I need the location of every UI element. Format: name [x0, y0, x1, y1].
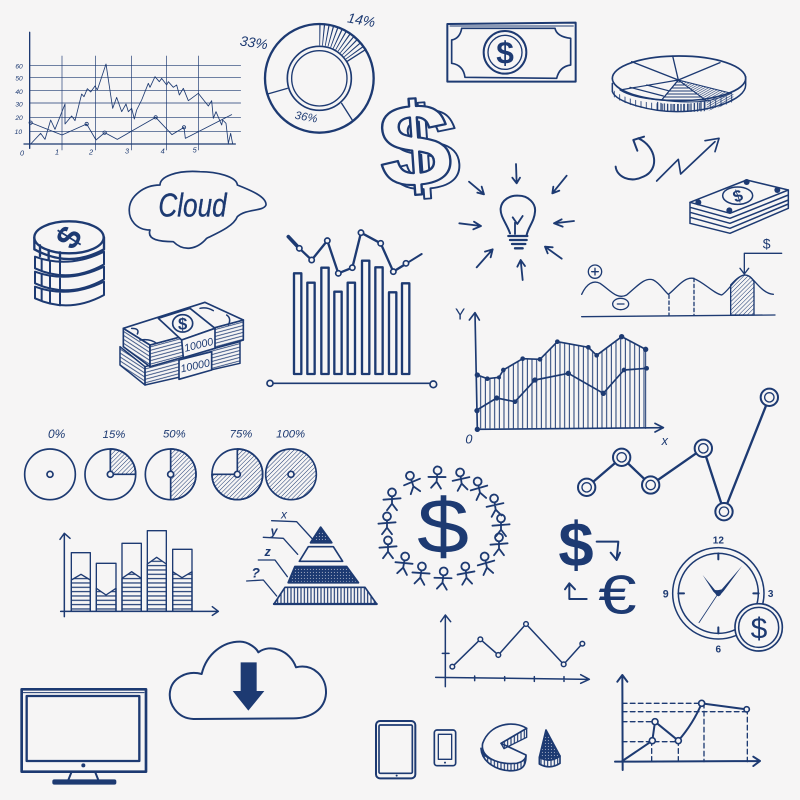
- icon: coin stack: [34, 220, 104, 305]
- line chart: top left: 2: [88, 147, 93, 156]
- icon: banknote: [447, 23, 576, 82]
- icon: stack of banknotes 10000: 10000: [183, 336, 215, 355]
- dashed line chart bottom right: [615, 675, 760, 770]
- figures ring: [378, 466, 510, 590]
- icon: 3D pie with missing wedge: [481, 724, 527, 771]
- line chart: top left: 1: [55, 147, 59, 156]
- currency exchange dollar and euro: €: [598, 565, 636, 626]
- pyramid chart with labels: [247, 508, 377, 604]
- icon: smartphone: [434, 730, 456, 766]
- clock with coin: 12: [713, 535, 724, 546]
- line chart: top left: 50: [15, 76, 23, 83]
- icon: stack of banknotes 10000: 10000: [180, 357, 211, 375]
- wave chart with shaded region: [582, 235, 782, 317]
- pie: 50%: [145, 428, 196, 500]
- line chart: top left: 60: [15, 63, 23, 70]
- thought cloud with text: Cloud: [158, 188, 228, 225]
- icon: flat bill stack: [690, 179, 788, 233]
- pie: 50%: 50%: [163, 428, 186, 440]
- pie: 0%: 0%: [48, 427, 66, 441]
- clock with coin: 9: [663, 588, 669, 600]
- icon: cone: [539, 730, 560, 767]
- line chart: top left: 4: [161, 146, 165, 155]
- small line chart: [436, 615, 589, 687]
- lower stack: [120, 342, 240, 385]
- line chart: top left: 20: [14, 115, 23, 122]
- progress pies row: [25, 427, 316, 500]
- arrow: curved: [616, 137, 654, 179]
- line chart: top left: 5: [193, 146, 198, 155]
- icon: stack of banknotes 10000: [120, 302, 243, 385]
- pie: 15%: 15%: [103, 429, 125, 441]
- line chart: top left: 3: [125, 146, 130, 155]
- large dollar sign: $: [417, 483, 469, 570]
- wave chart with shaded region: $: [763, 235, 771, 251]
- donut chart: [239, 9, 377, 133]
- pyramid chart with labels: x: [280, 508, 288, 522]
- pie: 0%: [25, 427, 75, 500]
- area chart with Y and X axes: 0: [465, 432, 472, 446]
- area chart with Y and X axes: [455, 306, 669, 448]
- pie: 100%: [266, 428, 316, 500]
- clock with coin: 6: [716, 644, 722, 655]
- line chart: top left: 10: [15, 129, 22, 136]
- line chart: top left: [14, 32, 241, 157]
- clock with coin: [663, 535, 782, 655]
- pie: 100%: 100%: [276, 428, 305, 440]
- icon: banknote: $: [496, 34, 514, 70]
- icon: tablet: [376, 721, 415, 778]
- icon: light bulb with arrows: [459, 164, 574, 280]
- area chart with Y and X axes: Y: [455, 306, 465, 323]
- area chart with Y and X axes: x: [661, 434, 669, 448]
- bar chart with line overlay: [267, 230, 437, 388]
- donut chart: 36%: [294, 110, 318, 126]
- icon: flat bill stack: $: [730, 185, 746, 207]
- people ring around dollar sign: [378, 466, 510, 590]
- line chart: top left: 40: [15, 89, 23, 96]
- currency exchange dollar and euro: [558, 511, 636, 626]
- icon: 3D dollar sign: $: [383, 82, 465, 218]
- icon: desktop monitor: [22, 689, 146, 785]
- pyramid chart with labels: z: [263, 545, 271, 559]
- icon: coin stack: $: [49, 220, 91, 255]
- 3D pie chart: [612, 56, 746, 112]
- icon: cloud download: [170, 642, 326, 719]
- pie: 75%: 75%: [230, 428, 252, 440]
- line chart: top left: 30: [15, 101, 23, 108]
- icon: 3D dollar sign: $: [374, 78, 456, 214]
- donut chart: 33%: [239, 33, 269, 52]
- arrow: zigzag growth: [657, 138, 719, 181]
- donut chart: 14%: [346, 9, 377, 30]
- clock with coin: $: [751, 612, 768, 645]
- pyramid chart with labels: ?: [251, 564, 260, 580]
- bar chart with hatched fill: [60, 531, 218, 617]
- pyramid chart with labels: y: [269, 524, 278, 538]
- clock with coin: 3: [768, 589, 774, 600]
- icon: stack of banknotes 10000: $: [178, 314, 188, 333]
- pie: 15%: [85, 429, 136, 500]
- ring line chart: [578, 389, 778, 520]
- currency exchange dollar and euro: $: [558, 511, 594, 581]
- pie: 75%: [212, 428, 263, 500]
- line chart: top left: 0: [20, 148, 25, 157]
- thought cloud with text: [129, 171, 266, 248]
